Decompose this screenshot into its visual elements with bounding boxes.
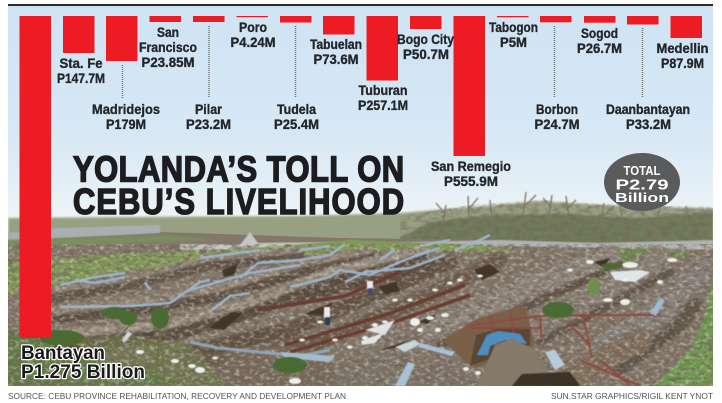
dark red rafters xyxy=(258,272,470,352)
shelter with rusty frame xyxy=(443,305,660,386)
total badge xyxy=(604,153,680,211)
dark gaps xyxy=(208,258,610,386)
total badge: Billion xyxy=(615,190,669,205)
bar: Bogo City xyxy=(410,16,442,29)
label: Sogod: P26.7M xyxy=(577,40,622,56)
label: Sta. Fe: P147.7M xyxy=(57,70,105,86)
bar: Pilar xyxy=(193,16,224,22)
bar: Borbon xyxy=(540,16,572,22)
label: Tabogon: P5M xyxy=(500,34,527,50)
mounds in the foreground xyxy=(220,346,338,386)
blue-grey roofing strips xyxy=(60,235,490,356)
total badge: P2.79 xyxy=(616,176,668,194)
label: Borbon: P24.7M xyxy=(534,116,580,132)
bar: San Remegio xyxy=(454,16,485,156)
bar: Bantayan xyxy=(20,16,51,338)
bar chart: losses by town xyxy=(20,16,702,338)
label: Tuburan: P257.1M xyxy=(358,97,408,113)
label: Medellin: P87.9M xyxy=(661,55,704,71)
white ducks xyxy=(136,258,677,384)
top rule xyxy=(8,4,713,6)
label: San Francisco: Francisco xyxy=(139,39,197,55)
label: Bantayan: Bantayan xyxy=(21,343,105,364)
label: Daanbantayan: Daanbantayan xyxy=(606,101,690,117)
labels: town names and amounts xyxy=(57,19,708,189)
label: Tabuelan: P73.6M xyxy=(314,51,358,67)
ground xyxy=(8,225,713,386)
bar: Tudela xyxy=(280,16,312,22)
bar: Daanbantayan xyxy=(627,16,658,24)
label: Bogo City: Bogo City xyxy=(397,31,454,47)
label: Madridejos: Madridejos xyxy=(92,101,160,117)
bar: Tuburan xyxy=(366,16,398,80)
label: San Remegio: P555.9M xyxy=(444,173,498,189)
label: San Francisco: P23.85M xyxy=(142,54,194,70)
label: Poro: P4.24M xyxy=(230,34,276,50)
label: Bantayan: P1.275 Billion xyxy=(21,362,145,383)
tree line xyxy=(8,192,713,250)
total badge: TOTAL xyxy=(624,164,661,178)
label: Bantayan xyxy=(21,343,145,383)
label: Pilar: P23.2M xyxy=(186,116,231,132)
label: Borbon: Borbon xyxy=(536,101,578,117)
blue tarpaulin xyxy=(477,331,527,355)
bar: Tabogon xyxy=(497,16,528,17)
bar: Sta. Fe xyxy=(63,16,94,53)
title: YOLANDA’S TOLL ON xyxy=(73,150,404,190)
label: Tudela: Tudela xyxy=(277,101,316,117)
earth rows: right field xyxy=(300,255,700,385)
wall and fence xyxy=(8,225,160,241)
title: CEBU’S LIVELIHOOD xyxy=(73,183,404,223)
label: Sogod: Sogod xyxy=(581,25,618,41)
label: Tuburan: Tuburan xyxy=(358,82,408,98)
texture noise over the land xyxy=(8,244,713,386)
label: Pilar: Pilar xyxy=(195,101,222,117)
workers xyxy=(324,281,373,325)
label: Poro: Poro xyxy=(239,19,267,35)
pale sheets xyxy=(122,270,665,386)
green bushes xyxy=(40,263,623,373)
bar: San Francisco xyxy=(150,16,181,22)
label: Daanbantayan: P33.2M xyxy=(626,116,671,132)
bar: Tabuelan xyxy=(323,16,354,34)
green strips xyxy=(8,240,520,295)
graphics credit: SUN.STAR GRAPHICS/RIGIL KENT YNOT xyxy=(551,391,713,401)
bar: Madridejos xyxy=(106,16,138,61)
label: Tabuelan: Tabuelan xyxy=(310,36,362,52)
label: Madridejos: P179M xyxy=(106,116,146,132)
title xyxy=(73,150,404,223)
source credit: SOURCE: CEBU PROVINCE REHABILITATION, RECOVERY AND DEVELOPMENT PLAN xyxy=(8,391,346,401)
label: San Francisco: San xyxy=(157,24,179,40)
label: San Remegio: San Remegio xyxy=(431,158,511,174)
label: Medellin: Medellin xyxy=(656,40,708,56)
thatched mound in front of tarp xyxy=(477,338,556,386)
label: Bogo City: P50.7M xyxy=(403,46,449,62)
earth rows: left field xyxy=(55,250,450,360)
label: Tudela: P25.4M xyxy=(274,116,319,132)
bar: Poro xyxy=(236,16,268,17)
bar: Medellin xyxy=(670,16,702,38)
label: Tabogon: Tabogon xyxy=(489,19,538,35)
label: Sta. Fe: Sta. Fe xyxy=(60,55,103,71)
bar: Sogod xyxy=(584,16,616,23)
